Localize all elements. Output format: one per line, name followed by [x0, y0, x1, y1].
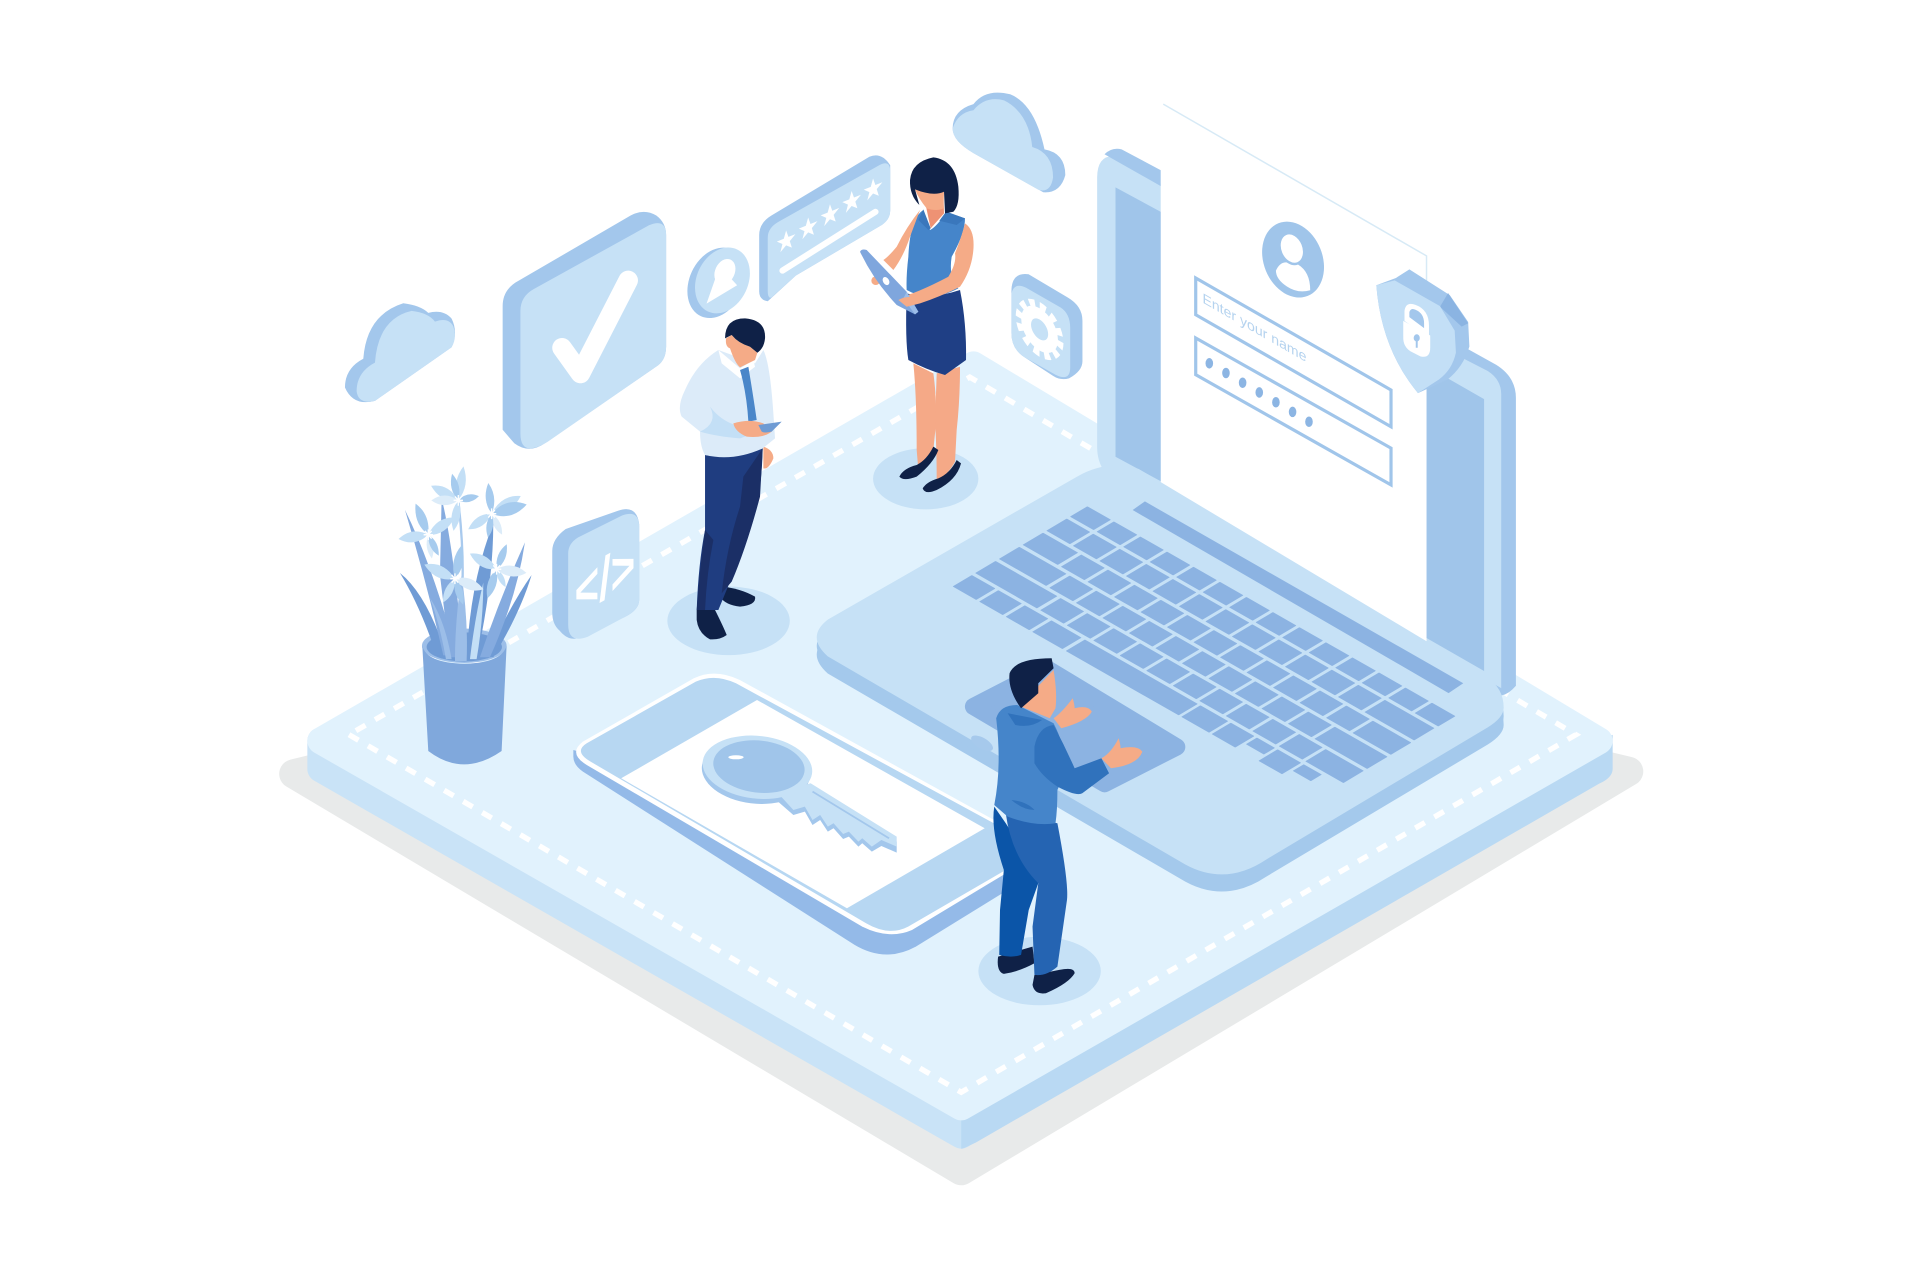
platform	[321, 365, 1613, 1149]
floating icon: gear tile	[1011, 274, 1082, 379]
lid left screen strip	[1116, 187, 1161, 481]
man with phone	[680, 318, 782, 639]
floating icon: top cloud	[953, 93, 1065, 192]
password field	[1196, 338, 1391, 485]
ground shadow	[294, 612, 1629, 1171]
phone with key	[573, 674, 1011, 955]
shield with lock	[1376, 269, 1469, 393]
phone screen	[621, 700, 985, 908]
phone body	[573, 750, 1008, 955]
floating icon: code tile	[552, 509, 639, 639]
laptop	[817, 104, 1516, 892]
white login panel	[1161, 104, 1427, 661]
person: man at laptop	[993, 658, 1142, 994]
name field: Enter your name	[1202, 290, 1306, 366]
ground disc: woman	[873, 448, 978, 509]
person: man with phone and woman with tablet	[680, 157, 974, 639]
floating icon: left cloud	[345, 303, 455, 402]
floating icon: check mark tile	[503, 212, 666, 449]
floating icon: rating speech bubble	[759, 155, 890, 301]
laptop base side	[817, 474, 1504, 892]
avatar icon	[1251, 212, 1335, 307]
lid top edge	[1104, 149, 1161, 186]
floating icon: code tile: </>	[575, 529, 635, 629]
plant in pot	[398, 465, 532, 764]
lid right edge	[1463, 347, 1516, 696]
touchpad	[973, 669, 1177, 784]
laptop base top	[817, 465, 1504, 874]
key	[697, 730, 897, 853]
keyboard	[954, 507, 1455, 796]
speaker bar	[1133, 501, 1463, 693]
name field	[1196, 278, 1391, 427]
front notch	[969, 732, 995, 754]
floating icon: user badge	[676, 238, 760, 328]
ground disc: man at laptop	[978, 937, 1101, 1005]
ground disc: man with phone	[667, 587, 790, 655]
phone face	[576, 674, 1011, 934]
lid right bezel	[1427, 349, 1501, 688]
lid right screen strip	[1427, 366, 1484, 671]
laptop lid left bezel	[1097, 156, 1161, 502]
woman with tablet	[860, 157, 974, 492]
